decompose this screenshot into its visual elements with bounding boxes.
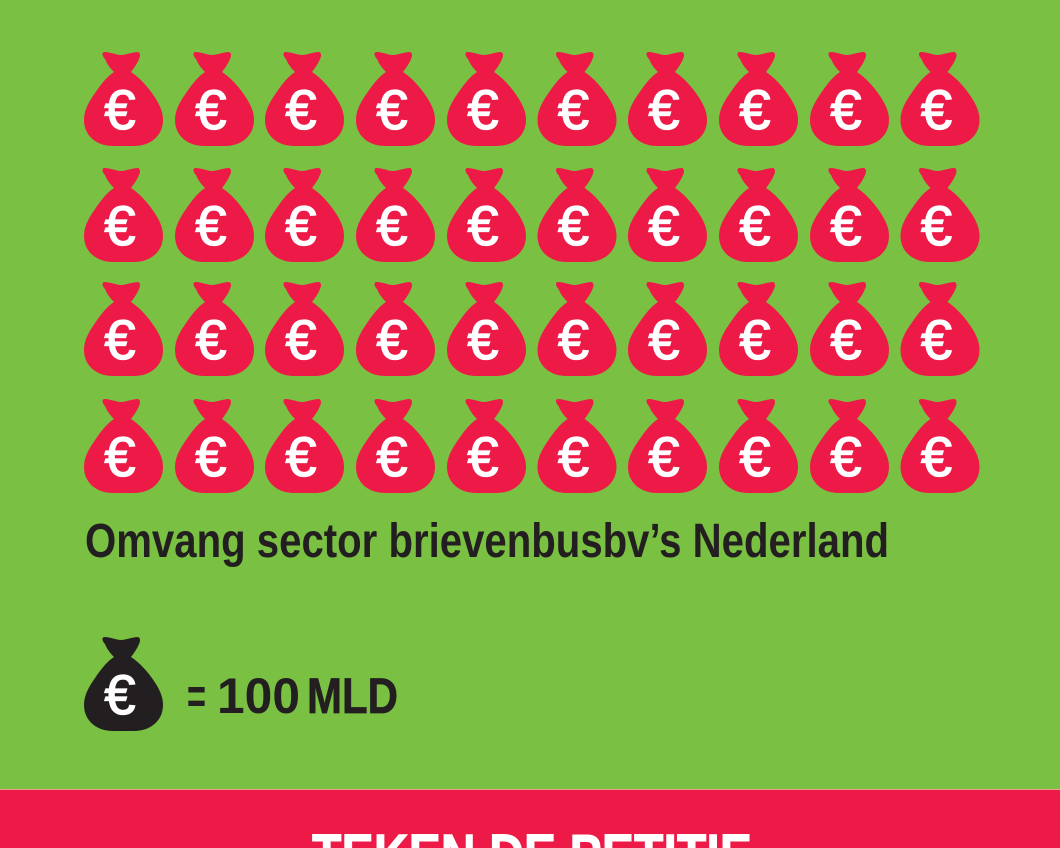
row 1 of money bags: € xyxy=(648,78,680,141)
row 2 of money bags: € xyxy=(376,194,408,257)
row 3 of money bags: € xyxy=(104,308,136,371)
row 2 of money bags: € xyxy=(648,194,680,257)
row 3 of money bags: € xyxy=(921,308,952,371)
row 2 of money bags: € xyxy=(195,194,227,257)
row 1 of money bags: € xyxy=(739,78,771,141)
legend icon: black money bag xyxy=(84,637,163,731)
row 1 of money bags: € xyxy=(467,78,499,141)
row 3 of money bags: € xyxy=(648,308,680,371)
row 3 of money bags: € xyxy=(739,308,771,371)
row 2 of money bags: € xyxy=(830,194,862,257)
row 4 of money bags: € xyxy=(195,425,227,488)
row 1 of money bags: € xyxy=(921,78,952,141)
row 1 of money bags: € xyxy=(195,78,227,141)
row 4 of money bags: € xyxy=(104,425,136,488)
row 4 of money bags: € xyxy=(921,425,952,488)
row 1 of money bags: € xyxy=(376,78,408,141)
row 4 of money bags: € xyxy=(376,425,408,488)
row 3 of money bags: € xyxy=(558,308,589,371)
row 2 of money bags: € xyxy=(467,194,499,257)
row 2 of money bags: € xyxy=(285,194,317,257)
row 2 of money bags: € xyxy=(104,194,136,257)
row 3 of money bags xyxy=(84,282,980,376)
row 2 of money bags: € xyxy=(739,194,771,257)
row 2 of money bags: € xyxy=(921,194,952,257)
row 1 of money bags: € xyxy=(830,78,862,141)
row 1 of money bags: € xyxy=(558,78,589,141)
row 4 of money bags: € xyxy=(648,425,680,488)
row 1 of money bags: € xyxy=(104,78,136,141)
row 4 of money bags xyxy=(84,399,980,493)
legend label: = xyxy=(187,668,206,724)
row 3 of money bags: € xyxy=(376,308,408,371)
row 3 of money bags: € xyxy=(285,308,317,371)
row 4 of money bags: € xyxy=(285,425,317,488)
heading: chart caption: Omvang sector brievenbusbv’s Nederland xyxy=(85,515,889,568)
row 4 of money bags: € xyxy=(467,425,499,488)
row 4 of money bags: € xyxy=(830,425,862,488)
row 3 of money bags: € xyxy=(467,308,499,371)
legend icon: black money bag: € xyxy=(104,663,136,726)
row 4 of money bags: € xyxy=(558,425,589,488)
row 4 of money bags: € xyxy=(739,425,771,488)
row 3 of money bags: € xyxy=(830,308,862,371)
call-to-action banner xyxy=(0,789,1060,848)
row 2 of money bags: € xyxy=(558,194,589,257)
legend label: 100 xyxy=(217,668,300,724)
legend label: MLD xyxy=(307,668,398,724)
row 3 of money bags: € xyxy=(195,308,227,371)
row 2 of money bags xyxy=(84,168,980,262)
legend label xyxy=(187,668,398,724)
pictogram: rows of money bags xyxy=(84,52,980,493)
row 1 of money bags xyxy=(84,52,980,146)
row 1 of money bags: € xyxy=(285,78,317,141)
